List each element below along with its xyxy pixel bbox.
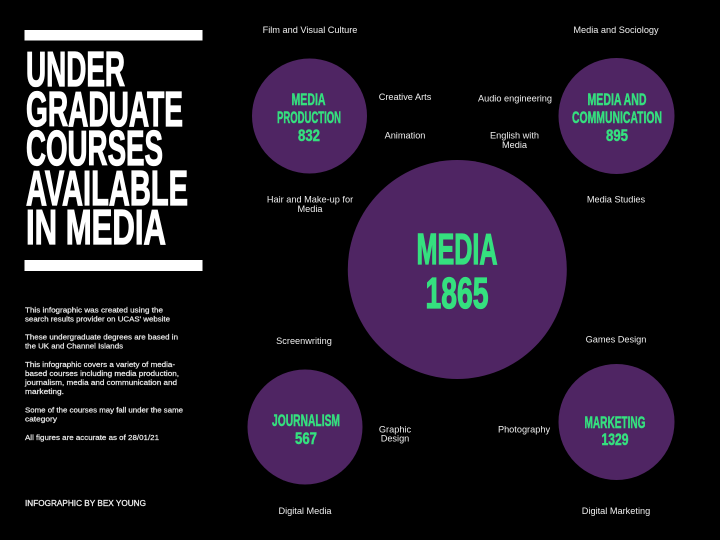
title block: [24, 30, 202, 271]
bubble: marketing: 1329: [602, 430, 628, 449]
course labels: English with: [490, 130, 539, 140]
course labels: Media: [297, 204, 323, 214]
bubble: journalism: JOURNALISM: [272, 411, 340, 430]
course labels: Media: [502, 140, 528, 150]
bubble: media production: 832: [298, 126, 320, 145]
description text: [24, 306, 183, 442]
title: COURSES: [26, 121, 163, 176]
bubble: media total: 1865: [426, 269, 488, 318]
bubble: media and communication: COMMUNICATION: [572, 108, 662, 127]
bubble: journalism: 567: [295, 429, 317, 448]
description text: based courses including media production,: [25, 369, 179, 378]
description text: search results provider on UCAS' website: [25, 314, 170, 324]
description text: All figures are accurate as of 28/01/21: [25, 433, 159, 442]
bubble: media and communication: MEDIA AND: [588, 90, 646, 109]
course labels: Photography: [498, 424, 550, 434]
title: AVAILABLE: [26, 161, 188, 216]
bubble: media and communication: 895: [606, 126, 628, 145]
bubble: media production: PRODUCTION: [277, 108, 341, 127]
course labels: Media and Sociology: [573, 25, 659, 35]
course labels: [263, 25, 659, 516]
bubble: media production: [252, 58, 367, 174]
course labels: Hair and Make-up for: [267, 194, 353, 204]
bubble: journalism: [248, 370, 362, 484]
course labels: Screenwriting: [276, 336, 332, 346]
course labels: Design: [381, 434, 409, 444]
bubble: marketing: MARKETING: [584, 413, 646, 432]
description text: These undergraduate degrees are based in: [25, 332, 178, 342]
credit: INFOGRAPHIC BY BEX YOUNG: [25, 498, 146, 508]
description text: This infographic was created using the: [25, 306, 163, 314]
description text: This infographic covers a variety of media-: [25, 360, 175, 369]
title: UNDER: [26, 42, 125, 97]
description text: Some of the courses may fall under the same: [25, 406, 183, 414]
course labels: Audio engineering: [478, 94, 552, 104]
course labels: Film and Visual Culture: [263, 25, 357, 35]
description text: category: [25, 414, 57, 424]
bubble: media and communication: [558, 58, 674, 174]
course labels: Creative Arts: [379, 92, 432, 102]
bubble: media total: [348, 160, 567, 379]
description text: journalism, media and communication and: [24, 378, 177, 387]
bubble: media production: MEDIA: [292, 90, 326, 109]
description text: the UK and Channel Islands: [25, 342, 123, 350]
bubble: media total: MEDIA: [416, 225, 498, 274]
course labels: Digital Marketing: [582, 506, 650, 516]
course labels: Graphic: [379, 424, 411, 434]
course labels: Media Studies: [587, 194, 646, 204]
course labels: Games Design: [586, 334, 646, 344]
title: [26, 42, 188, 255]
title: IN MEDIA: [26, 200, 166, 255]
course labels: Digital Media: [278, 506, 332, 516]
title: GRADUATE: [26, 82, 183, 137]
description text: marketing.: [25, 387, 64, 396]
course labels: Animation: [385, 130, 425, 140]
bubble: marketing: [558, 364, 674, 480]
